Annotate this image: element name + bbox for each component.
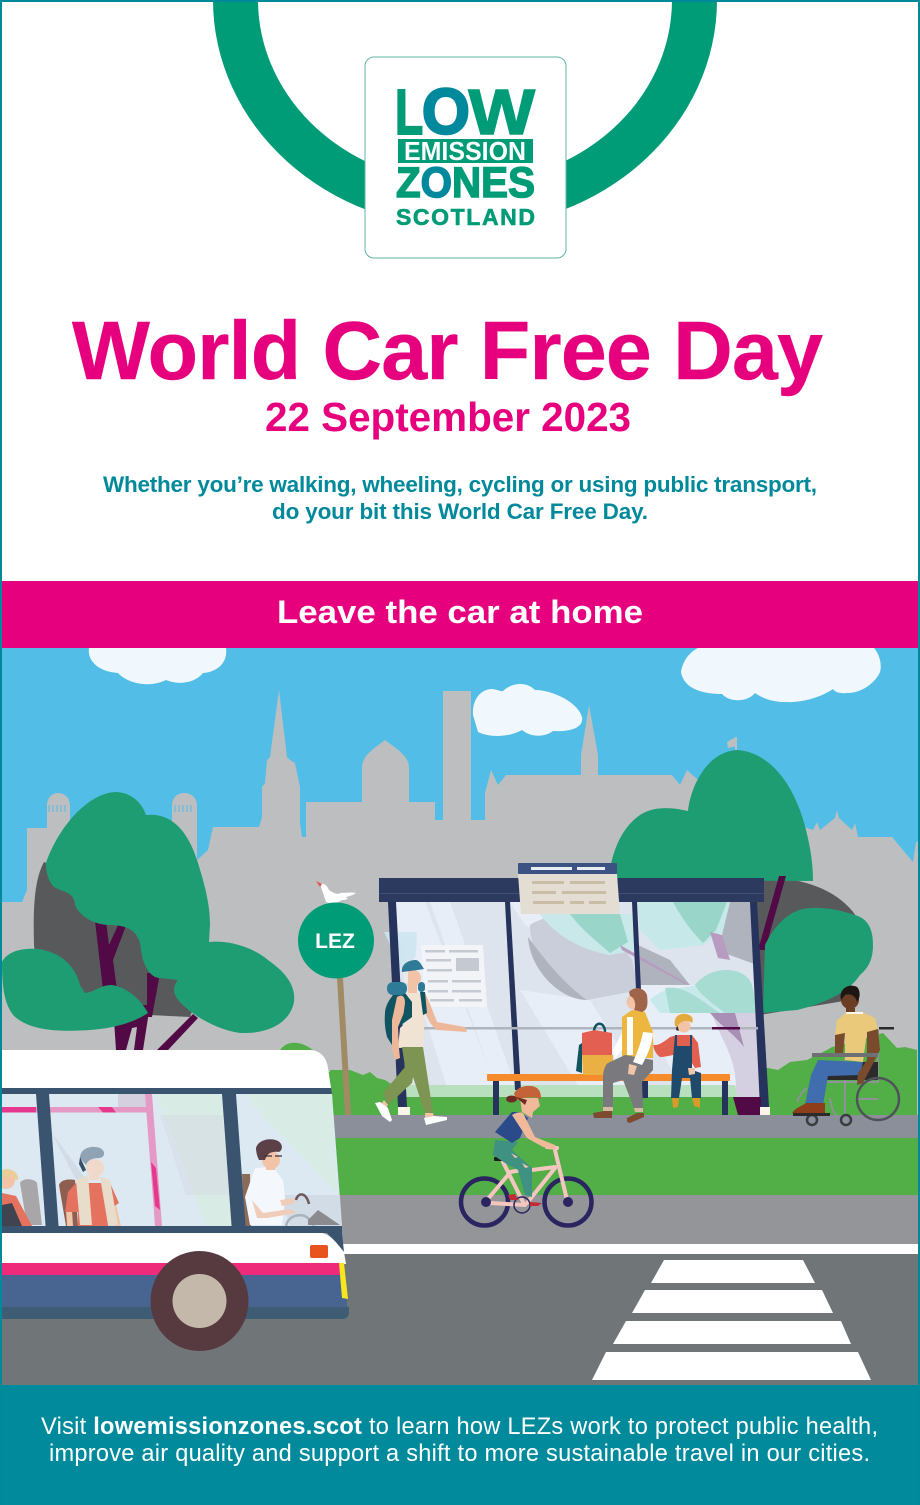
clouds [89,648,881,736]
date: 22 September 2023 [265,394,631,440]
footer panel [0,1385,920,1505]
seated child [653,1014,701,1108]
posts [388,902,769,1107]
lower body [2,1233,346,1264]
roof [379,878,764,902]
LEZ sign [298,902,374,1115]
bus [0,1050,349,1351]
green bushes [279,1033,917,1115]
trunk [95,921,198,1050]
road edge line [340,1244,918,1254]
footer panel: Visit lowemissionzones.scot to learn how LEZs work to protect public health, [41,1414,878,1440]
footer panel: improve air quality and support a shift to more sustainable travel in our cities. [49,1441,870,1467]
seated woman with backpack [576,988,653,1123]
sky [0,648,920,1128]
illustration scene [0,648,920,1385]
glass panel [392,902,762,1097]
intro text [103,472,817,524]
pavement [0,1115,920,1138]
roof sign [518,863,620,914]
title: World Car Free Day [72,305,823,397]
logo: Low Emission Zones Scotland: W [468,77,535,148]
green ring behind logo [213,0,717,228]
driver [242,1139,340,1226]
logo: Low Emission Zones Scotland: L [395,77,423,148]
walker with backpack [375,960,467,1125]
pillars [2,1088,344,1252]
cycle path [0,1195,920,1244]
dome windows [48,805,192,812]
bird [316,881,356,903]
far-left passenger [0,1169,42,1226]
left tree [2,792,294,1050]
logo: Low Emission Zones Scotland: EMISSION [404,136,526,166]
windows [2,1094,342,1226]
intro text: do your bit this World Car Free Day. [272,499,648,524]
logo: Low Emission Zones Scotland: SCOTLAND [396,204,535,230]
logo: Low Emission Zones Scotland: O [422,76,470,148]
right tree [609,750,873,1015]
grab rail [2,1094,162,1226]
bus shelter [379,863,770,1115]
wheelchair user [792,986,899,1125]
logo: Low Emission Zones Scotland: ZONES [396,159,535,207]
banner: leave the car at home: Leave the car at home [277,594,643,630]
LEZ sign: LEZ [315,930,355,953]
city skyline silhouette [2,690,918,1130]
grass verge [0,1138,920,1195]
banner: leave the car at home [0,581,920,648]
intro text: Whether you’re walking, wheeling, cycling or using public transport, [103,472,817,497]
road [0,1254,920,1385]
passenger [59,1147,121,1226]
rail [424,1027,758,1030]
flag [727,737,737,750]
cyclist [461,1086,592,1226]
logo: Low Emission Zones Scotland [365,57,566,258]
zebra crossing [592,1260,871,1380]
roof [2,1050,331,1088]
timetable poster [421,945,487,1007]
wheel [150,1251,248,1351]
backpack [576,1024,614,1075]
bench [487,1074,730,1115]
